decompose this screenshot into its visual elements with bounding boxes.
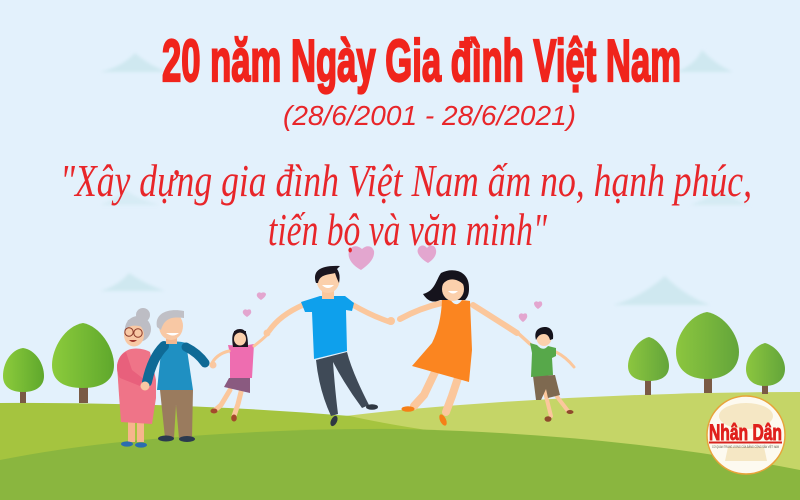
trees right: [628, 312, 785, 395]
mother: [387, 270, 517, 427]
logo: Nhân Dân: [707, 396, 785, 474]
back hills: [0, 392, 800, 490]
date range: (28/6/2001 - 28/6/2021): [283, 100, 576, 131]
slogan: [60, 155, 752, 255]
trees left: [3, 323, 114, 403]
son: [519, 327, 574, 422]
father: [264, 266, 390, 427]
girl: [210, 329, 268, 422]
slogan line 2: tiến bộ và văn minh": [268, 204, 547, 255]
background clouds: [100, 50, 750, 305]
foreground hill: [0, 429, 800, 500]
hearts: [243, 246, 542, 322]
grandfather: [140, 310, 216, 442]
grandmother: [117, 308, 156, 448]
